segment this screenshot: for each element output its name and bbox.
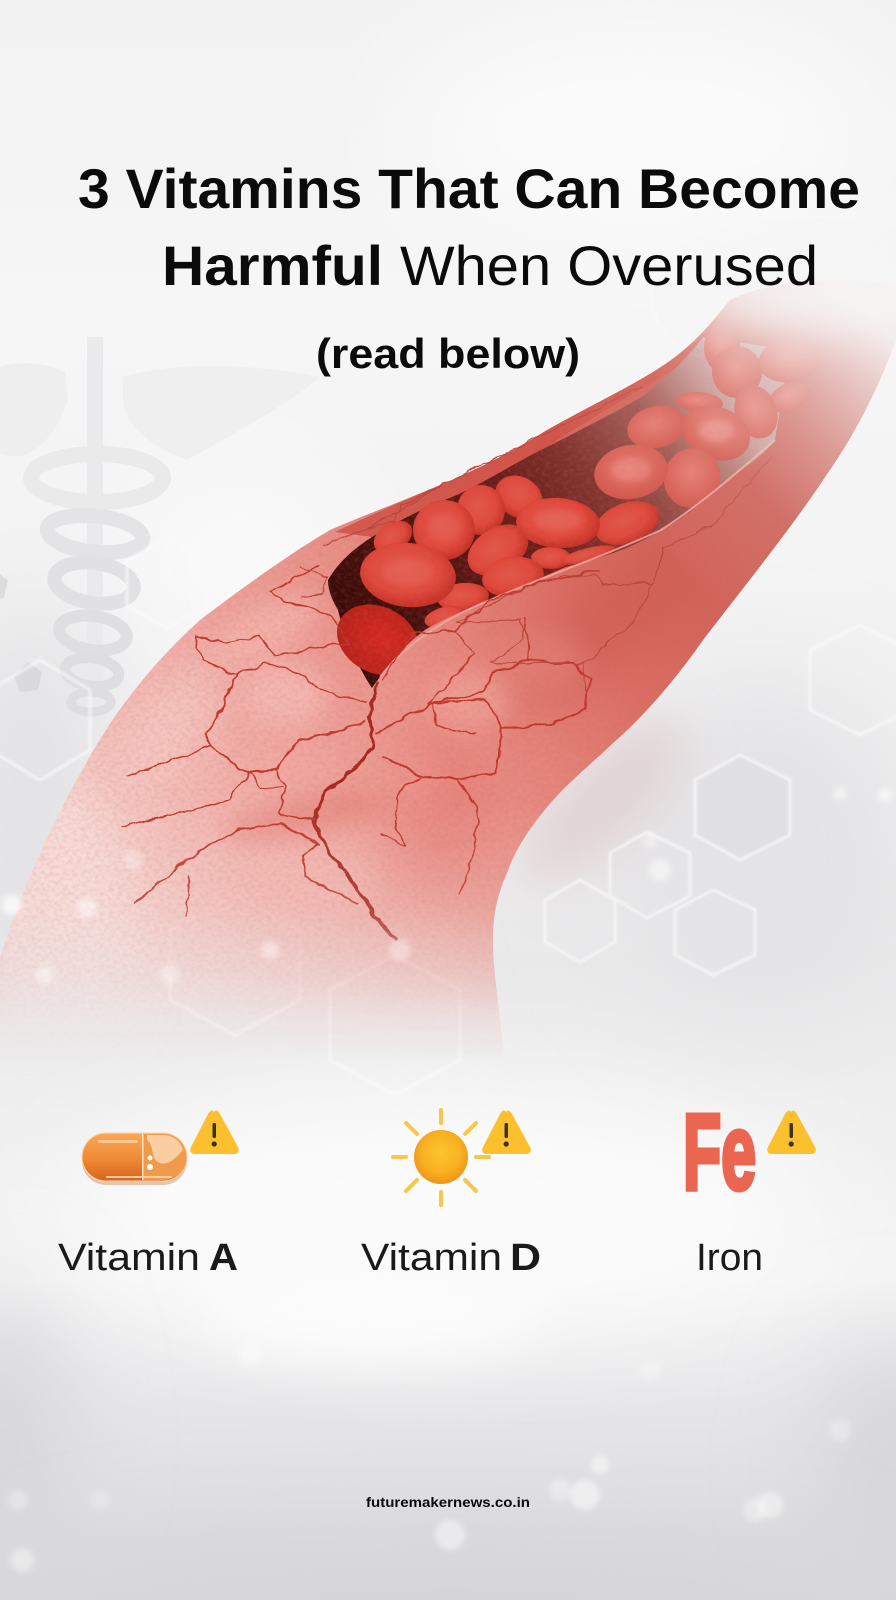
item: Iron (683, 1091, 816, 1279)
label: Vitamin D: D (510, 1237, 541, 1279)
medical caduceus watermark (0, 337, 320, 720)
label: Vitamin A: Vitamin (58, 1237, 200, 1279)
front wall lobe and surface shading (0, 400, 896, 1070)
title (78, 157, 860, 297)
lumen opening (328, 337, 790, 688)
item: Vitamin D (361, 1110, 541, 1279)
mist over the far end of the vessel (680, 255, 896, 335)
icon: vitamin pill (82, 1133, 187, 1185)
title: 3 Vitamins That Can Become (78, 157, 860, 220)
icon: warning triangle (767, 1111, 816, 1154)
subtitle: read below: (read below) (316, 330, 580, 377)
label: Iron: Iron (696, 1237, 763, 1279)
cracks upper wall (300, 387, 771, 700)
icon: sun (393, 1110, 489, 1205)
label: Vitamin A: A (209, 1237, 238, 1279)
icon: Fe element symbol: Fe (683, 1091, 756, 1212)
label: Vitamin D: Vitamin (361, 1237, 502, 1279)
title: Harmful (162, 234, 383, 297)
icon: warning triangle (482, 1111, 531, 1154)
title: When Overused (400, 234, 818, 297)
icon: warning triangle (190, 1111, 239, 1154)
vessel wall (0, 270, 896, 1070)
hexagon pattern (0, 538, 896, 1095)
footer website: futuremakernews.co.in (366, 1494, 530, 1510)
cracks lower wall (122, 567, 600, 940)
item: Vitamin A (58, 1111, 239, 1279)
soft bokeh particles (2, 787, 892, 1572)
wall surface texture (0, 409, 719, 990)
red blood cells (337, 330, 801, 675)
blood vessel illustration (0, 270, 896, 1070)
